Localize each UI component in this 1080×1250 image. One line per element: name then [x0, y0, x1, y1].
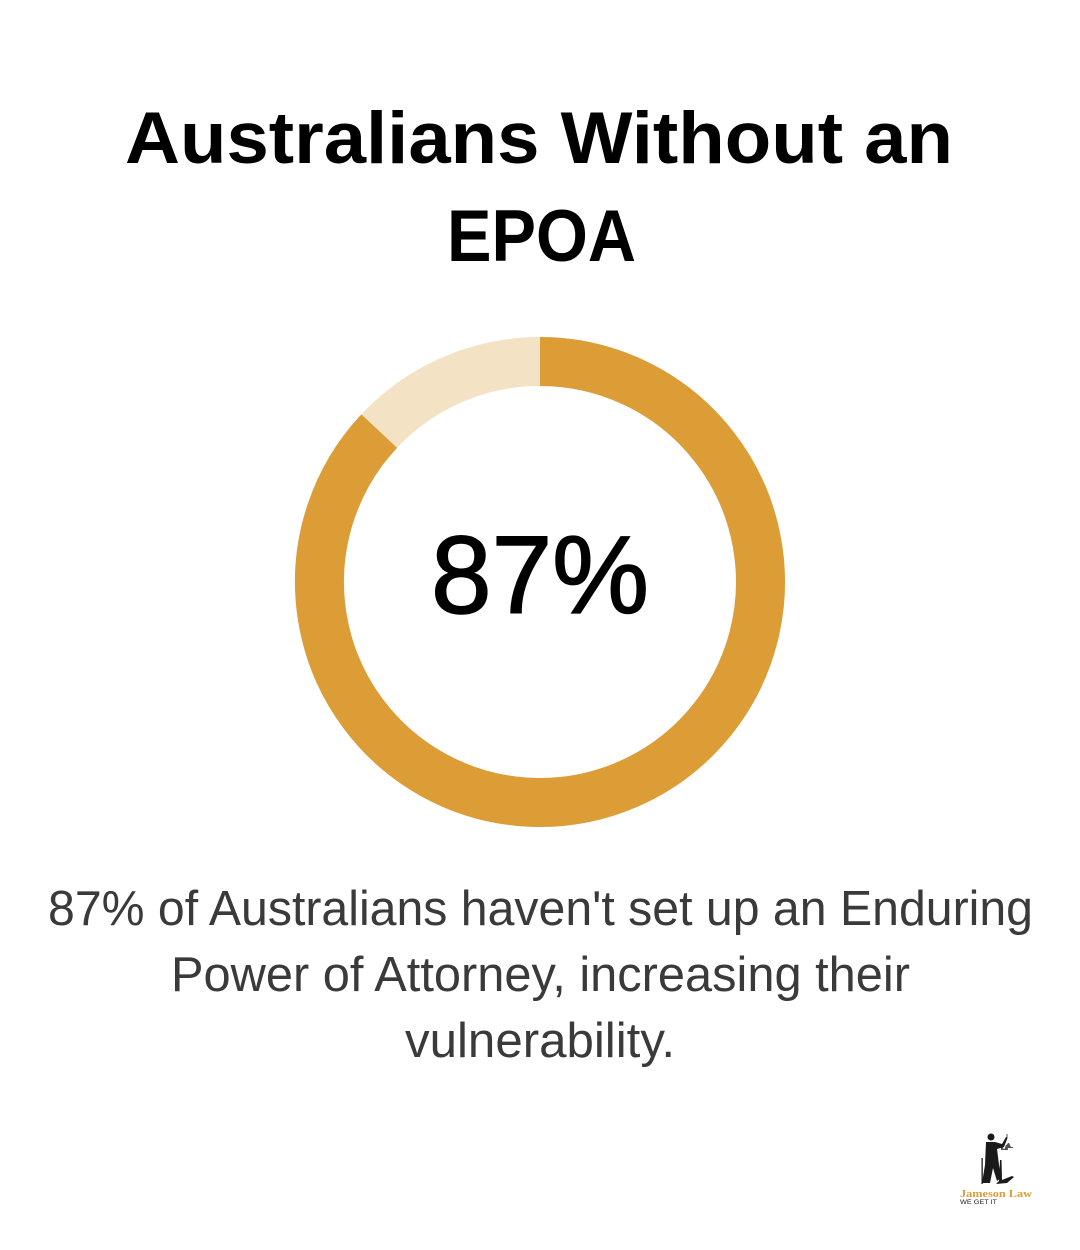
title: Australians Without an — [125, 98, 953, 179]
description text — [48, 882, 1033, 1068]
logo name: Jameson Law — [960, 1188, 1032, 1200]
logo tagline: WE GET IT — [960, 1199, 997, 1206]
description text: vulnerability. — [405, 1014, 675, 1068]
description text: 87% of Australians haven't set up an Enduring — [48, 882, 1033, 936]
logo: Jameson Law — [960, 1134, 1032, 1206]
title — [125, 98, 953, 277]
donut chart: 87% — [319, 362, 760, 802]
donut centre value: 87% — [431, 514, 649, 637]
title: EPOA — [447, 196, 636, 277]
icon: lady justice — [982, 1134, 1014, 1184]
description text: Power of Attorney, increasing their — [171, 948, 910, 1002]
